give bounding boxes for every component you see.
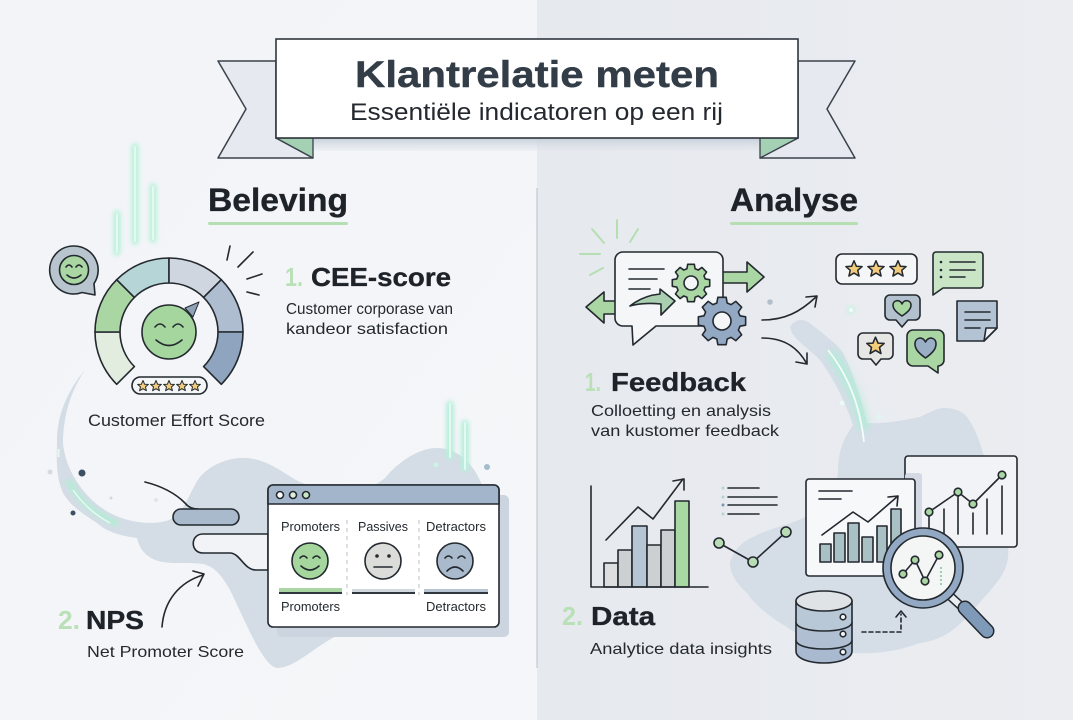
note bbox=[957, 301, 997, 341]
connector pill and lines bbox=[145, 482, 268, 570]
card: line chart back bbox=[905, 456, 1017, 547]
column: detractors: Detractors bbox=[426, 519, 486, 534]
label: Feedback block: 1. bbox=[585, 367, 601, 397]
glow bars: top left bbox=[117, 147, 153, 252]
label: Data block: Analytice data insights bbox=[590, 641, 772, 658]
small line chart bbox=[714, 527, 791, 567]
blob and sweep: right background bbox=[730, 320, 1008, 653]
sweep glow bbox=[767, 299, 882, 442]
card: bar chart front bbox=[806, 479, 915, 576]
arrows: to feedback icons bbox=[762, 296, 817, 364]
title banner bbox=[218, 39, 855, 158]
sweep glow bbox=[58, 449, 118, 524]
background: right panel bbox=[537, 0, 1073, 720]
label: CEE-score block: CEE-score bbox=[311, 262, 451, 292]
background: left panel bbox=[0, 0, 537, 720]
label: Customer Effort Score: Customer Effort Score bbox=[88, 411, 265, 430]
inner arrow bbox=[630, 289, 675, 315]
label: Feedback block: Feedback bbox=[611, 367, 747, 397]
label: CEE-score block bbox=[285, 262, 453, 338]
icon: feedback bubble with gears and arrows bbox=[580, 220, 764, 345]
rays bbox=[580, 220, 638, 275]
label: CEE-score block: kandeor satisfaction bbox=[286, 321, 448, 338]
label: Feedback block: van kustomer feedback bbox=[591, 423, 780, 440]
column: promoters: Promoters bbox=[281, 599, 340, 614]
column: passives bbox=[352, 519, 415, 594]
gauge: customer effort score bbox=[95, 246, 262, 394]
dashed arrow bbox=[862, 611, 906, 632]
green gear bbox=[672, 264, 710, 302]
label: Data block bbox=[562, 601, 772, 658]
column: promoters bbox=[279, 519, 342, 614]
star bubble bbox=[858, 333, 893, 365]
column: detractors: Detractors bbox=[426, 599, 486, 614]
glow bars: NPS bbox=[450, 404, 465, 469]
NPS window bbox=[268, 485, 509, 637]
heart bubble large bbox=[907, 330, 944, 373]
decorative dots bbox=[48, 462, 490, 516]
title text: Klantrelatie meten bbox=[355, 54, 719, 95]
arrow: towards NPS window bbox=[162, 571, 204, 627]
list bubble bbox=[933, 252, 983, 295]
label: Feedback block bbox=[585, 367, 780, 440]
star rating pill bbox=[132, 377, 207, 394]
label: NPS block: Net Promoter Score bbox=[87, 644, 244, 661]
chart: rising bars bbox=[591, 479, 708, 587]
ribbon: left tail bbox=[218, 61, 313, 158]
ribbon: right tail bbox=[760, 61, 855, 158]
speech bubble bbox=[615, 252, 723, 345]
gauge needle bbox=[185, 302, 199, 317]
label: NPS block: NPS bbox=[86, 605, 144, 635]
column: promoters: Promoters bbox=[281, 519, 340, 534]
column: detractors bbox=[424, 519, 488, 614]
arrow: left bbox=[586, 292, 618, 323]
subtitle text: Essentiële indicatoren op een rij bbox=[350, 99, 723, 126]
heading: Beleving: Beleving bbox=[208, 182, 348, 218]
list lines bbox=[722, 486, 777, 516]
blob and sweep: left background bbox=[57, 370, 490, 668]
arrow: right bbox=[720, 262, 764, 292]
blue gear bbox=[698, 297, 746, 345]
label: Feedback block: Colloetting en analysis bbox=[591, 403, 771, 420]
database bbox=[796, 591, 852, 663]
label: CEE-score block: Customer corporase van bbox=[286, 301, 453, 318]
feedback icon cluster bbox=[836, 252, 997, 373]
label: Data block: 2. bbox=[562, 601, 583, 631]
heart bubble small bbox=[885, 295, 920, 327]
window title bar bbox=[268, 485, 499, 504]
magnifying glass bbox=[883, 528, 987, 631]
smiley face bbox=[142, 305, 196, 359]
label: CEE-score block: 1. bbox=[285, 262, 303, 292]
label: NPS block: 2. bbox=[58, 605, 80, 635]
icon: smiley speech bubble bbox=[50, 246, 98, 295]
emphasis ticks bbox=[227, 246, 262, 295]
heading: Analyse: Analyse bbox=[730, 182, 858, 218]
label: Data block: Data bbox=[591, 601, 656, 631]
rating card bbox=[836, 254, 917, 284]
label: NPS block bbox=[58, 605, 244, 661]
column: passives: Passives bbox=[358, 519, 408, 534]
